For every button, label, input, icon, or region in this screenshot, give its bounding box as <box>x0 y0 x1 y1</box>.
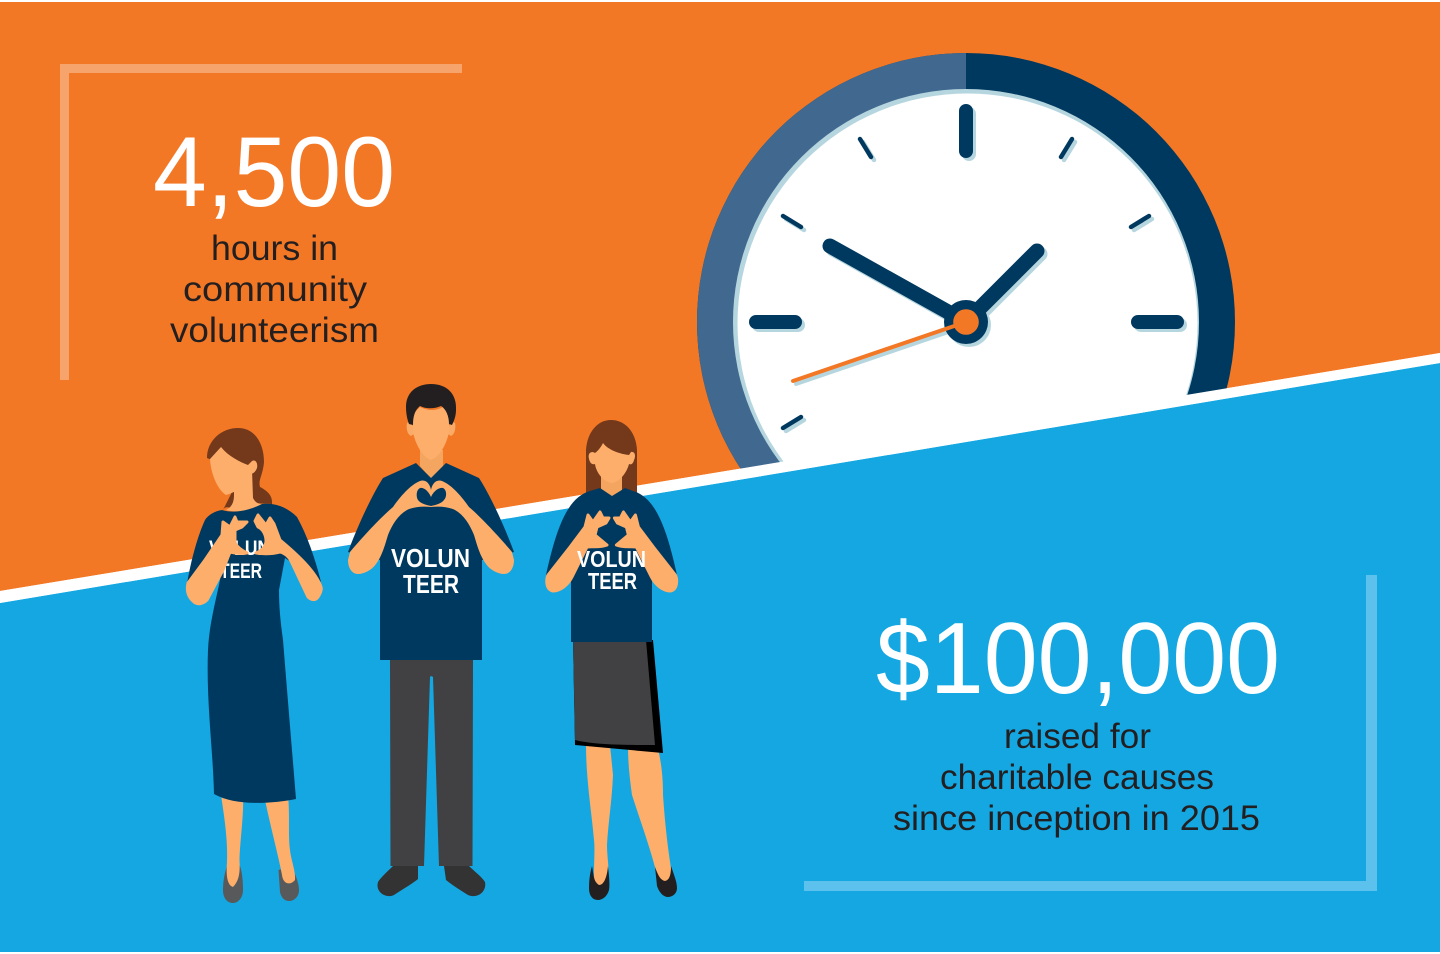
clock hands <box>793 246 1040 384</box>
frame: bottom-right bracket <box>804 575 1377 891</box>
frame: top-left bracket <box>60 64 462 380</box>
ears <box>407 422 455 436</box>
shirt text <box>209 537 270 583</box>
arms and heart hands <box>187 515 321 604</box>
stat: 4,500: 4,500 <box>153 116 395 227</box>
trousers <box>390 660 473 866</box>
hair and ponytail <box>207 428 272 510</box>
hair <box>586 420 637 495</box>
shoes <box>589 866 677 900</box>
shirt text <box>391 543 470 599</box>
shirt text: VOLUN <box>577 546 646 572</box>
clock tick marks <box>756 111 1180 431</box>
shirt text: TEER <box>588 568 637 594</box>
face <box>413 407 449 460</box>
caption: raised for charitable causes since inception in 2015: charitable causes <box>940 757 1214 797</box>
face <box>589 443 635 483</box>
shirt text: TEER <box>220 560 262 583</box>
caption: raised for charitable causes since inception in 2015: since inception in 2015 <box>893 798 1260 838</box>
caption: hours in community volunteerism: community <box>183 269 367 309</box>
figure: woman with long hair <box>546 420 677 900</box>
neck <box>226 470 262 511</box>
shirt text: TEER <box>403 569 459 599</box>
dress <box>187 504 321 803</box>
neck <box>601 470 622 497</box>
caption: raised for charitable causes since inception in 2015 <box>893 716 1260 838</box>
shirt <box>348 463 514 660</box>
face <box>210 447 257 495</box>
figure: man <box>348 384 514 896</box>
caption: hours in community volunteerism <box>170 228 379 350</box>
legs <box>586 745 672 887</box>
diagonal white band <box>0 353 1440 603</box>
panel: orange upper background <box>0 2 1440 591</box>
arms and heart hands <box>348 481 514 574</box>
shirt <box>546 488 677 642</box>
figure: woman with ponytail <box>187 428 321 903</box>
caption: hours in community volunteerism: volunteerism <box>170 310 379 350</box>
heart gap <box>417 488 446 506</box>
shirt text <box>577 546 646 594</box>
panel: blue lower background <box>0 363 1440 952</box>
shirt text: VOLUN <box>209 537 270 560</box>
caption: raised for charitable causes since inception in 2015: raised for <box>1004 716 1151 756</box>
caption: hours in community volunteerism: hours in <box>211 228 338 268</box>
hair <box>406 384 456 425</box>
clock rim <box>697 53 1235 469</box>
stat: $100,000: $100,000 <box>876 603 1280 715</box>
icon: wall clock <box>697 53 1235 469</box>
shirt text: VOLUN <box>391 543 470 573</box>
shoes <box>377 866 485 896</box>
neck <box>420 450 443 479</box>
legs and shoes <box>221 795 299 903</box>
skirt <box>573 640 663 753</box>
arms and heart hands <box>547 512 677 591</box>
